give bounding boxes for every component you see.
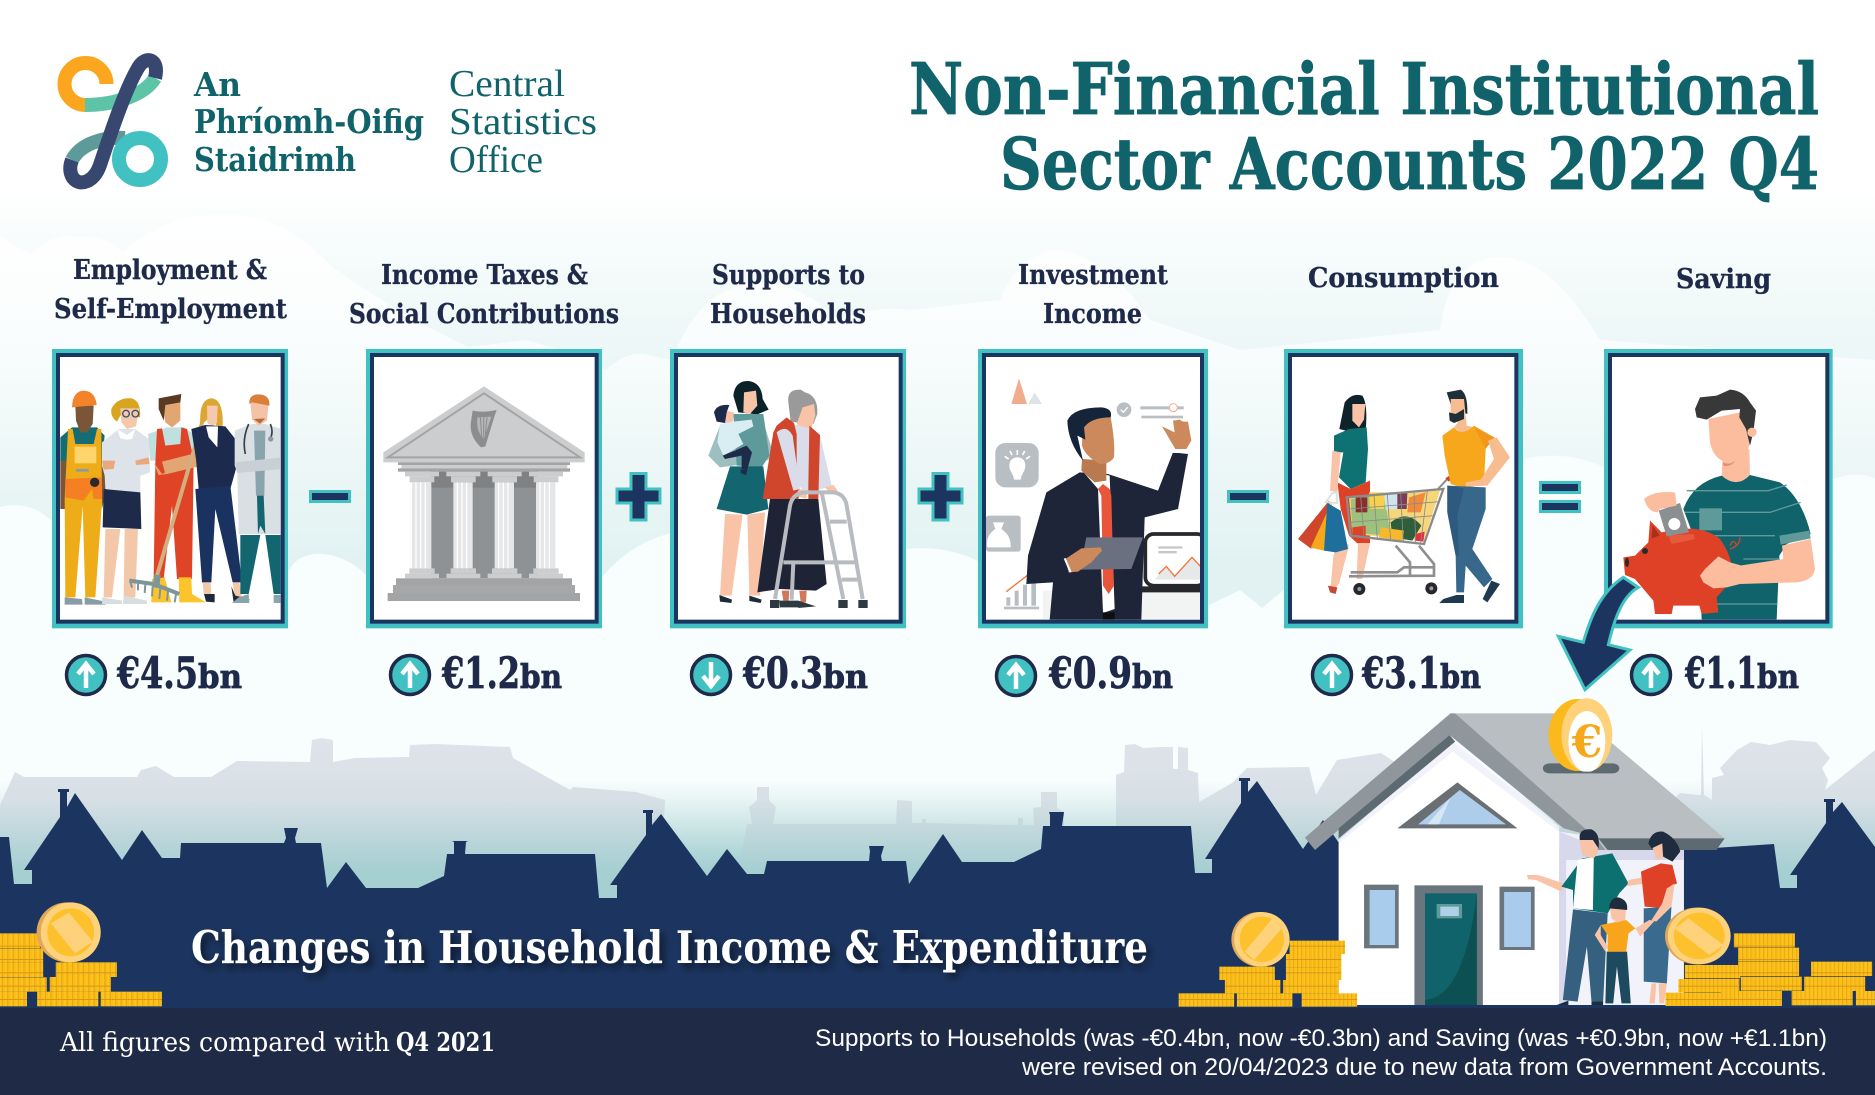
panel: supports to households xyxy=(670,349,906,628)
illustration: office woman xyxy=(102,398,150,604)
illustration: banknote and hand xyxy=(1644,492,1742,588)
value: investment income xyxy=(996,649,1173,699)
footer note: comparison: All figures compared with xyxy=(59,1028,390,1058)
heading: income taxes: Income Taxes & xyxy=(381,260,588,291)
heading: employment: Self-Employment xyxy=(54,294,287,325)
footer note: revision xyxy=(815,1025,1827,1081)
footer note: revision: Supports to Households (was -€0.4bn, now -€0.3bn) and Saving (was +€0.9bn, now +€1.1bn) xyxy=(815,1025,1827,1052)
illustration: man with beard xyxy=(1439,390,1510,603)
illustration: walking frame xyxy=(770,492,868,608)
arrow: saving flows to house xyxy=(1558,577,1638,690)
panel: consumption xyxy=(1284,349,1523,628)
left window xyxy=(1364,885,1399,948)
heading: income taxes: Social Contributions xyxy=(349,299,619,330)
illustration: icons xyxy=(986,378,1184,609)
logo mark xyxy=(65,60,161,182)
operator: plus xyxy=(919,474,962,520)
illustration: shopping trolley xyxy=(1347,471,1459,595)
value: employment: bn xyxy=(198,657,242,696)
illustration: elderly woman xyxy=(757,390,838,608)
heading: supports: Households xyxy=(710,299,866,330)
value: saving: bn xyxy=(1757,657,1799,696)
value: consumption: €3.1 xyxy=(1361,649,1440,699)
illustration: columns xyxy=(405,472,563,578)
panel: employment workers xyxy=(52,349,288,628)
logo wordmark: English: Office xyxy=(449,139,543,181)
illustration: woman with bags xyxy=(1298,395,1370,594)
heading: consumption: Consumption xyxy=(1308,263,1499,294)
heading: income taxes xyxy=(349,260,619,330)
big coin left xyxy=(1231,912,1290,967)
illustration: laptop xyxy=(1043,534,1205,620)
woman xyxy=(1627,831,1680,1003)
illustration: pediment with harp xyxy=(383,386,585,472)
coin stacks beside house right xyxy=(1665,933,1875,1006)
value: employment xyxy=(66,649,242,699)
heading: supports xyxy=(710,260,866,330)
illustration: piggy bank xyxy=(1623,521,1740,614)
logo wordmark: English: Central xyxy=(449,63,565,105)
value: investment income: €0.9 xyxy=(1048,649,1132,699)
panel: saving xyxy=(1604,349,1833,628)
operator: plus xyxy=(617,474,660,520)
value: supports xyxy=(692,649,868,699)
value: supports: €0.3 xyxy=(742,649,823,699)
banner heading: Changes in Household Income & Expenditure xyxy=(191,921,1148,974)
heading: investment income: Income xyxy=(1043,299,1142,330)
value: income taxes: €1.2 xyxy=(441,649,520,699)
heading: employment: Employment & xyxy=(73,255,267,286)
illustration: businessman xyxy=(1026,407,1191,620)
heading: saving: Saving xyxy=(1676,264,1771,295)
illustration: mother with child xyxy=(708,381,772,603)
illustration: construction worker xyxy=(60,391,107,605)
man xyxy=(1527,829,1628,1005)
value: consumption xyxy=(1312,649,1481,699)
big coin right xyxy=(1665,908,1731,964)
heading: investment income: Investment xyxy=(1018,260,1168,291)
logo wordmark: Irish: An xyxy=(193,65,241,104)
value: income taxes: bn xyxy=(520,657,562,696)
euro coin on roof xyxy=(1549,698,1612,772)
house walls xyxy=(1339,742,1684,1005)
logo wordmark: English xyxy=(449,63,597,181)
coin slot xyxy=(1543,763,1619,773)
foreground rooftops silhouette xyxy=(0,778,1875,1012)
logo wordmark: Irish: Staidrimh xyxy=(194,140,356,179)
coin stack left edge xyxy=(0,902,162,1006)
illustration: business woman xyxy=(191,398,249,603)
logo wordmark: Irish xyxy=(193,65,424,179)
operator: minus xyxy=(310,492,350,502)
child xyxy=(1595,897,1655,1003)
value: income taxes xyxy=(390,649,562,699)
attic window xyxy=(1397,782,1518,828)
heading: investment income xyxy=(1018,260,1168,330)
heading: employment xyxy=(54,255,287,325)
value: investment income: bn xyxy=(1132,657,1173,696)
logo wordmark: Irish: Phríomh-Oifig xyxy=(194,102,424,141)
operator: minus xyxy=(1228,492,1268,502)
title xyxy=(909,47,1819,206)
operator: equals xyxy=(1540,482,1580,512)
footer bar xyxy=(0,1008,1875,1095)
value: saving: €1.1 xyxy=(1684,649,1757,699)
footer note: comparison: Q4 2021 xyxy=(396,1028,495,1058)
euro coin on roof: € xyxy=(1571,717,1602,768)
right window xyxy=(1499,887,1535,950)
illustration: doctor xyxy=(232,394,283,603)
value: saving xyxy=(1632,649,1799,699)
house roof xyxy=(1305,713,1725,850)
logo wordmark: English: Statistics xyxy=(449,101,597,143)
panel: government building xyxy=(366,349,602,628)
house xyxy=(1179,713,1875,1007)
value: employment: €4.5 xyxy=(116,649,198,699)
value: supports: bn xyxy=(823,657,868,696)
front door xyxy=(1414,885,1483,1005)
distant city skyline xyxy=(0,725,1875,900)
coin stacks beside house left xyxy=(1179,941,1357,1007)
heading: supports: Supports to xyxy=(712,260,865,291)
illustration: farmer with rake xyxy=(129,394,206,602)
panel: investment income xyxy=(978,349,1208,628)
value: consumption: bn xyxy=(1440,657,1481,696)
footer note: revision: were revised on 20/04/2023 due to new data from Government Accounts. xyxy=(1021,1054,1827,1081)
illustration: man xyxy=(1683,390,1815,620)
illustration: steps xyxy=(388,578,580,601)
